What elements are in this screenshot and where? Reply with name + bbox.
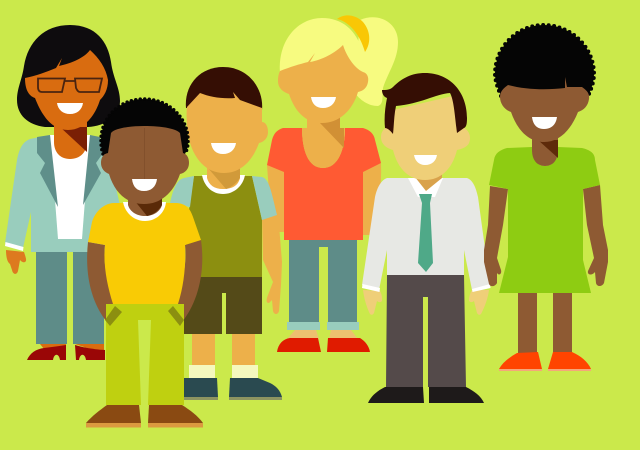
face centre line bbox=[144, 128, 146, 190]
left shoe bbox=[27, 345, 66, 360]
left cuff bbox=[362, 284, 380, 292]
face bbox=[25, 50, 108, 130]
hand bbox=[6, 250, 26, 274]
hair bbox=[17, 25, 120, 127]
left hand bbox=[363, 290, 382, 315]
ponytail bbox=[354, 17, 398, 106]
face bbox=[187, 92, 268, 173]
smile bbox=[57, 103, 83, 114]
hair bbox=[382, 73, 467, 134]
smile bbox=[211, 143, 236, 154]
smile bbox=[414, 155, 437, 165]
face bbox=[278, 45, 368, 123]
neck shadow bbox=[208, 168, 240, 189]
neck bbox=[207, 160, 240, 189]
person: man with shirt and tie bbox=[362, 73, 490, 403]
left lapel bbox=[37, 135, 58, 207]
shirt bbox=[88, 203, 201, 304]
hair curls bbox=[101, 99, 188, 154]
left sole bbox=[499, 369, 542, 371]
left pocket band bbox=[105, 306, 122, 326]
dress bbox=[489, 147, 600, 293]
hair mass bbox=[495, 25, 594, 96]
face bbox=[381, 95, 470, 180]
neck bbox=[128, 195, 162, 216]
neck shadow bbox=[411, 172, 442, 191]
collar bbox=[123, 202, 166, 221]
right shoe bbox=[327, 338, 370, 352]
afro hair bbox=[495, 25, 594, 96]
right lapel bbox=[83, 135, 103, 205]
feet bbox=[287, 330, 358, 339]
scrunchie bbox=[337, 15, 369, 52]
neck shadow bbox=[134, 198, 162, 216]
smile bbox=[532, 117, 557, 129]
right sock bbox=[232, 365, 258, 378]
left shoe bbox=[183, 378, 218, 397]
hair bbox=[186, 67, 262, 110]
legs bbox=[518, 290, 572, 355]
right pocket band bbox=[168, 306, 184, 326]
collar bbox=[408, 178, 443, 197]
right shoe bbox=[229, 378, 282, 397]
right sole bbox=[148, 423, 203, 428]
pants bbox=[386, 275, 466, 387]
face bbox=[500, 77, 589, 142]
right arm bbox=[583, 185, 608, 286]
left sleeve bbox=[170, 176, 194, 207]
glasses bbox=[38, 78, 102, 92]
arms bbox=[267, 163, 381, 235]
person: woman with glasses and teal jacket bbox=[5, 25, 128, 360]
shirt bbox=[362, 178, 490, 290]
right hand bbox=[469, 290, 489, 315]
neck bbox=[54, 120, 87, 159]
right sole bbox=[229, 397, 282, 400]
shirt bbox=[267, 128, 381, 240]
hair bbox=[280, 18, 366, 75]
hair mass bbox=[101, 99, 188, 154]
person: front boy in yellow shirt bbox=[86, 99, 203, 428]
smile bbox=[311, 97, 336, 108]
right sole bbox=[548, 369, 591, 371]
right sleeve bbox=[252, 176, 277, 220]
right shoe bbox=[148, 405, 203, 423]
hair bbox=[101, 99, 188, 154]
left shoe bbox=[368, 387, 424, 403]
tie bbox=[418, 194, 433, 272]
right leg bbox=[232, 334, 255, 366]
person: boy in olive vest bbox=[170, 67, 282, 400]
shirt bbox=[50, 135, 90, 239]
neck bbox=[532, 130, 558, 166]
collar bbox=[202, 175, 245, 194]
left sock bbox=[189, 365, 215, 378]
right shoe bbox=[429, 387, 484, 403]
left shoe bbox=[86, 405, 141, 423]
neck shadow bbox=[538, 140, 558, 158]
jacket bbox=[5, 135, 128, 252]
pants bbox=[36, 239, 104, 344]
hair curls bbox=[495, 25, 594, 96]
left shoe bbox=[277, 338, 321, 352]
person: blonde woman in orange shirt bbox=[267, 15, 398, 352]
left sole bbox=[183, 397, 218, 400]
left cuff bbox=[287, 322, 320, 330]
vest bbox=[186, 176, 262, 277]
left sole bbox=[86, 423, 141, 428]
feet bbox=[40, 344, 104, 350]
left leg bbox=[192, 334, 215, 366]
neck shadow bbox=[60, 127, 87, 152]
right cuff bbox=[472, 284, 490, 292]
person: woman with afro in green dress bbox=[484, 25, 608, 371]
left shoe bbox=[499, 352, 542, 369]
smile bbox=[132, 179, 157, 191]
cuff bbox=[5, 242, 24, 251]
right arm bbox=[168, 240, 202, 322]
right shoe bbox=[548, 352, 591, 369]
face bbox=[101, 126, 189, 204]
shorts bbox=[184, 277, 262, 334]
right cuff bbox=[327, 322, 359, 330]
pants bbox=[289, 240, 357, 322]
left arm bbox=[484, 186, 508, 286]
right shoe bbox=[75, 345, 105, 360]
left arm bbox=[87, 242, 122, 322]
pants bbox=[106, 304, 184, 405]
right arm bbox=[262, 213, 282, 314]
neck shadow bbox=[320, 117, 344, 148]
neck bbox=[302, 110, 345, 168]
